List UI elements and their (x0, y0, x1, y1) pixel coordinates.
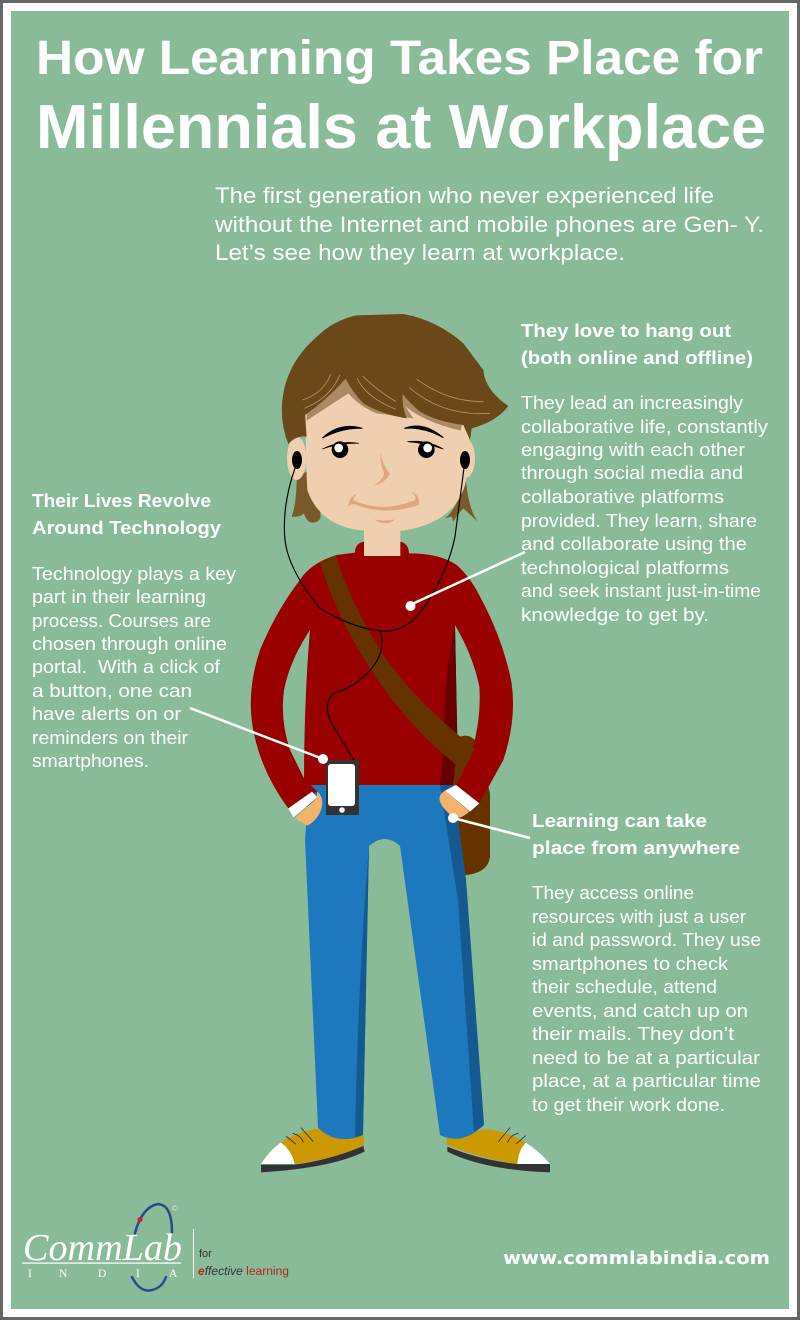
body: technology: have alerts on or (32, 703, 181, 724)
earbuds (292, 451, 470, 469)
heading: hang out: They love to hang out (521, 320, 731, 341)
body: anywhere: events, and catch up on (532, 1000, 748, 1021)
logo registered mark: © (172, 1204, 178, 1213)
heading: anywhere: place from anywhere (532, 837, 740, 858)
body: technology: chosen through online (32, 633, 227, 654)
intro text: without the Internet and mobile phones are Gen- Y. (214, 212, 764, 237)
body: anywhere: their schedule, attend (532, 976, 717, 997)
heading: anywhere: Learning can take (532, 810, 707, 831)
body: technology (32, 563, 237, 771)
body: technology: part in their learning (32, 586, 206, 607)
body: hang out: collaborative life, constantly (521, 416, 769, 437)
sweater (251, 542, 513, 826)
body: anywhere: They access online (532, 882, 694, 903)
title: How Learning Takes Place for (36, 32, 763, 85)
body: hang out: provided. They learn, share (521, 510, 757, 531)
heading: anywhere (532, 810, 740, 858)
body: hang out: knowledge to get by. (521, 604, 709, 625)
body: anywhere: to get their work done. (532, 1094, 725, 1115)
eyes (332, 441, 348, 458)
earphones and cable (284, 468, 464, 762)
body: technology: Technology plays a key (32, 563, 237, 584)
body: hang out (521, 392, 769, 625)
body: hang out: collaborative platforms (521, 486, 724, 507)
logo: CommLab India: effective learning (198, 1266, 289, 1278)
body: technology: smartphones. (32, 750, 149, 771)
callout: technology (190, 708, 328, 764)
logo India letters: I (136, 1268, 140, 1280)
jeans (305, 785, 484, 1139)
logo wordmark: CommLab (23, 1227, 182, 1269)
body: technology: a button, one can (32, 680, 192, 701)
title: Millennials at Workplace (36, 93, 766, 162)
fringe shadow (307, 350, 467, 431)
logo: CommLab India (22, 1204, 289, 1290)
body: anywhere: smartphones to check (532, 953, 729, 974)
logo tagline: for (199, 1248, 212, 1260)
website url: www.commlabindia.com (503, 1248, 770, 1269)
character illustration (251, 314, 550, 1172)
intro text (214, 183, 764, 265)
logo India letters: A (169, 1268, 178, 1280)
logo India letters: N (59, 1268, 68, 1280)
heading: technology (32, 490, 222, 538)
hair back (292, 467, 478, 523)
heading: hang out: (both online and offline) (521, 347, 753, 368)
heading: hang out (521, 320, 753, 368)
body: anywhere: need to be at a particular (532, 1047, 760, 1068)
callout: anywhere (448, 813, 530, 838)
body: hang out: and seek instant just-in-time (521, 580, 761, 601)
body: anywhere: id and password. They use (532, 929, 761, 950)
logo red dot (137, 1217, 143, 1222)
nose (374, 453, 390, 486)
intro text: The first generation who never experienced life (215, 183, 714, 208)
shoes (261, 1128, 550, 1172)
body: hang out: through social media and (521, 462, 743, 483)
body: hang out: and collaborate using the (521, 533, 747, 554)
heading: technology: Their Lives Revolve (32, 490, 211, 511)
title (36, 32, 766, 162)
face (282, 314, 508, 531)
body: anywhere: place, at a particular time (532, 1070, 761, 1091)
hair strands (302, 374, 490, 414)
heading: technology: Around Technology (32, 517, 222, 538)
logo India letters: I (28, 1268, 32, 1280)
neck (364, 520, 400, 556)
text block: anywhere (532, 810, 761, 1115)
body: anywhere: their mails. They don’t (532, 1023, 734, 1044)
body: technology: reminders on their (32, 727, 188, 748)
smartphone (326, 760, 359, 815)
intro text: Let’s see how they learn at workplace. (215, 240, 625, 265)
eyelids (322, 441, 443, 449)
eyebrows (322, 426, 443, 438)
body: hang out: engaging with each other (521, 439, 745, 460)
body: anywhere: resources with just a user (532, 906, 746, 927)
mouth (348, 491, 419, 511)
body: anywhere (532, 882, 761, 1115)
text block: technology (32, 490, 237, 771)
hair (282, 314, 508, 444)
body: technology: process. Courses are (32, 610, 211, 631)
logo orbit arcs (132, 1204, 172, 1290)
body: technology: portal. With a click of (32, 656, 221, 677)
body: hang out: technological platforms (521, 557, 729, 578)
body: hang out: They lead an increasingly (521, 392, 744, 413)
bag (453, 736, 490, 875)
logo India letters (28, 1268, 178, 1280)
callout: hang out (406, 552, 525, 611)
logo India letters: D (98, 1268, 106, 1280)
text block: hang out (521, 320, 769, 625)
